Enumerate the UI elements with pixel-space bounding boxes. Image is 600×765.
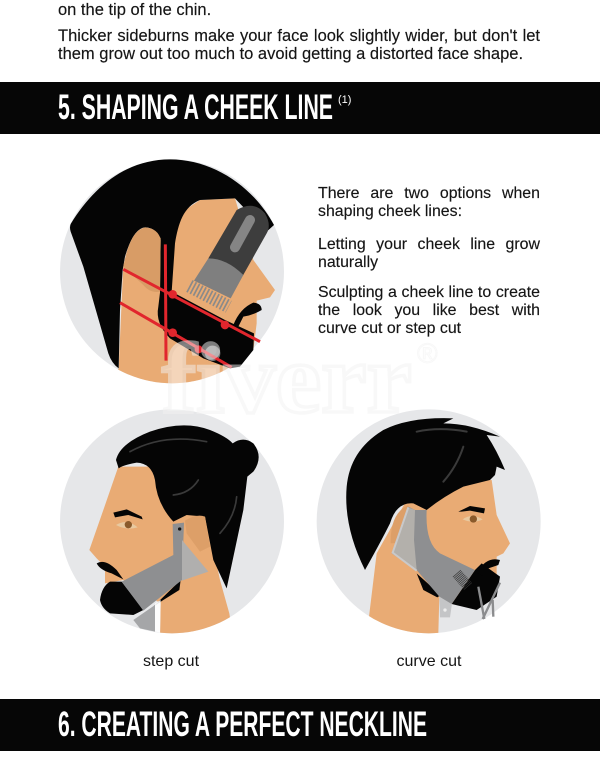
- illustration: curve cut man: [317, 409, 541, 640]
- text: intro paragraphs: Thicker sideburns make your face look slightly wider, but don't let: [58, 27, 540, 45]
- text: intro paragraphs: on the tip of the chin.: [58, 1, 211, 19]
- heading band: section 6: [0, 699, 600, 751]
- text: cheek line options: the look you like best with: [318, 302, 540, 319]
- text: cheek line options: Letting your cheek line grow: [318, 236, 540, 253]
- watermark: fiverr: fiverr: [162, 323, 412, 434]
- illustration: step cut man: [60, 409, 284, 640]
- heading band: section 5: (1): [338, 94, 351, 106]
- text: cheek line options: curve cut or step cut: [318, 320, 461, 337]
- illustration: cheek line with clipper: [60, 159, 540, 634]
- heading band: section 5: [0, 82, 600, 134]
- text: cheek line options: [318, 185, 540, 337]
- text: cheek line options: naturally: [318, 254, 378, 271]
- text: cheek line options: There are two options when: [318, 185, 540, 202]
- text: cheek line options: Sculpting a cheek line to create: [318, 284, 540, 301]
- watermark: fiverr: ®: [417, 338, 438, 369]
- text: intro paragraphs: them grow out too much to avoid getting a distorted face shape.: [58, 45, 523, 63]
- text: cheek line options: shaping cheek lines:: [318, 203, 462, 220]
- caption: step cut: step cut: [143, 653, 199, 670]
- text: intro paragraphs: [58, 1, 540, 63]
- heading band: section 5: 5. SHAPING A CHEEK LINE: [58, 88, 333, 127]
- caption: curve cut: curve cut: [397, 653, 461, 670]
